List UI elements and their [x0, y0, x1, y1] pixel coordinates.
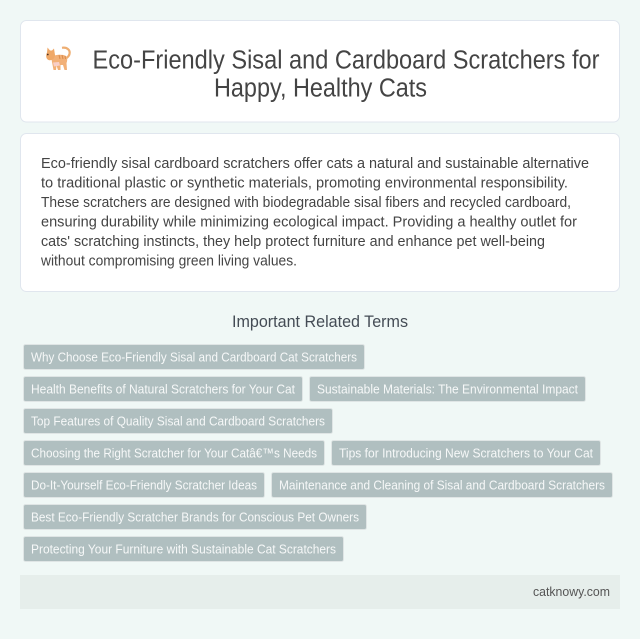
tag 2: [24, 376, 302, 402]
tag 10: Protecting Your Furniture with Sustainable Cat Scratchers: [31, 542, 336, 556]
tag 8: [272, 472, 612, 498]
tag 10: [24, 536, 344, 562]
tag 7: [24, 472, 264, 498]
description text: These scratchers are designed with biodegradable sisal fibers and recycled cardboard,: [41, 195, 571, 211]
tag 7: Do-It-Yourself Eco-Friendly Scratcher Ideas: [31, 478, 257, 492]
panel: description: [20, 134, 620, 292]
tag 3: Sustainable Materials: The Environmental Impact: [317, 382, 578, 396]
tag 4: [24, 408, 332, 434]
tag 8: Maintenance and Cleaning of Sisal and Cardboard Scratchers: [279, 478, 605, 492]
tag 5: [24, 440, 324, 466]
tag 6: Tips for Introducing New Scratchers to Your Cat: [339, 446, 593, 460]
description text: cats' scratching instincts, they help protect furniture and enhance pet well-being: [41, 234, 545, 250]
tag 5: Choosing the Right Scratcher for Your Catâ€™s Needs: [31, 446, 317, 460]
description text: Eco-friendly sisal cardboard scratchers offer cats a natural and sustainable alternative: [41, 156, 589, 172]
heading: related terms: Important Related Terms: [232, 313, 408, 331]
tag 1: Why Choose Eco-Friendly Sisal and Cardboard Cat Scratchers: [31, 350, 357, 364]
tag 4: Top Features of Quality Sisal and Cardboard Scratchers: [31, 414, 325, 428]
description text: ensuring durability while minimizing ecological impact. Providing a healthy outlet for: [41, 214, 577, 230]
title text: [92, 46, 600, 102]
tag 1: [24, 344, 364, 370]
tag 2: Health Benefits of Natural Scratchers for Your Cat: [31, 382, 295, 396]
footer: [20, 575, 620, 609]
tag 9: [24, 504, 366, 530]
related terms tags: [24, 344, 612, 562]
tag 9: Best Eco-Friendly Scratcher Brands for Conscious Pet Owners: [31, 510, 359, 524]
title text: Eco-Friendly Sisal and Cardboard Scratchers for: [92, 46, 600, 74]
description text: [40, 156, 589, 270]
tag 3: [310, 376, 586, 402]
description text: to traditional plastic or synthetic materials, promoting environmental responsibility.: [41, 176, 568, 192]
footer: catknowy.com: [533, 584, 610, 599]
icon: cat: [46, 48, 70, 70]
title text: Happy, Healthy Cats: [214, 74, 427, 102]
tag 6: [332, 440, 600, 466]
panel: title: [20, 20, 620, 122]
description text: without compromising green living values.: [40, 254, 297, 270]
